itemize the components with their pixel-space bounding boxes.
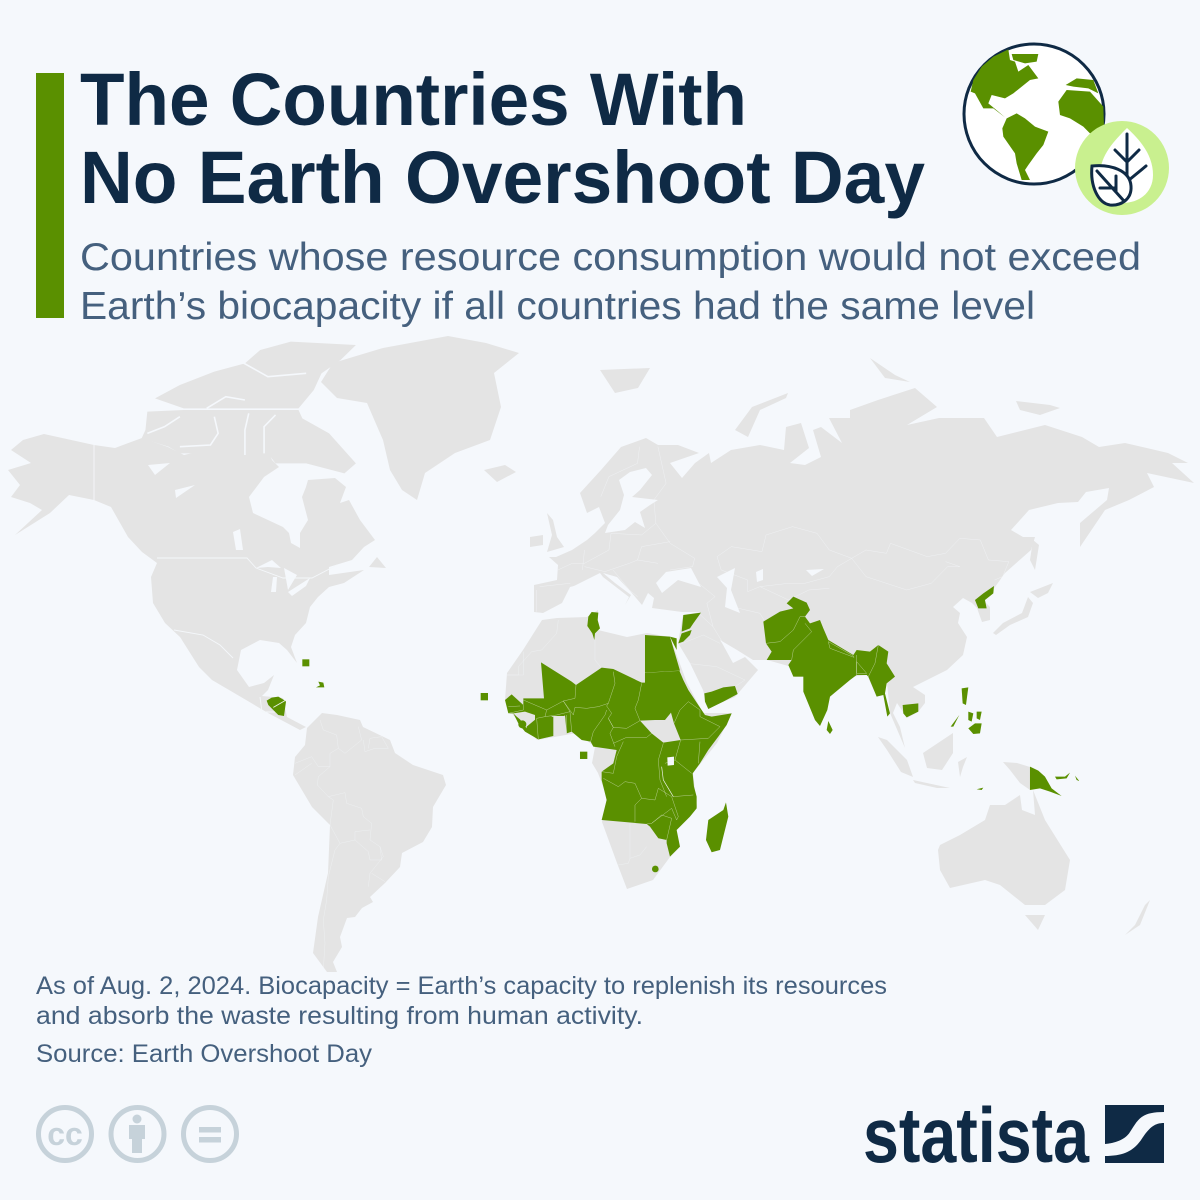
world map [8, 336, 1194, 972]
country borders: Eurasia [536, 447, 1009, 657]
North Africa and Levant countries [587, 612, 738, 872]
footnote: As of Aug. 2, 2024. Biocapacity = Earth’s capacity to replenish its resources [36, 972, 887, 1000]
Statista logo [863, 1091, 1164, 1179]
source: Source: Earth Overshoot Day [36, 1040, 373, 1068]
highlighted countries: South and Southeast Asia [763, 586, 1079, 796]
African internal borders [508, 671, 720, 840]
Guinea (not highlighted) [513, 712, 535, 728]
title [80, 58, 925, 219]
subtitle [80, 236, 1141, 328]
Sub-Saharan Africa highlighted block [505, 662, 732, 857]
globe [964, 44, 1104, 184]
icon: attribution [111, 1108, 164, 1160]
Haiti [316, 682, 324, 687]
Honduras–Nicaragua border [273, 701, 285, 707]
footnote [36, 972, 887, 1030]
inland seas and lakes [148, 463, 824, 667]
other Asian countries [827, 586, 1079, 796]
marker: Sao Tome and Principe [580, 752, 587, 759]
South Asian borders [766, 617, 878, 677]
icon: Creative Commons [38, 1108, 92, 1160]
Liberia and Ivory Coast fill [527, 717, 553, 739]
accent bar [36, 73, 64, 318]
icon: Creative Commons: cc [47, 1116, 83, 1152]
Ghana (not highlighted) [552, 716, 566, 737]
title: No Earth Overshoot Day [80, 136, 925, 219]
country borders: Africa grey areas [507, 620, 745, 865]
Sierra Leone [518, 720, 526, 728]
subtitle: Earth’s biocapacity if all countries had the same level [80, 285, 1035, 328]
marker: Cape Verde [481, 693, 488, 700]
icon: no derivatives [184, 1108, 236, 1160]
base map: grey land [8, 336, 1194, 972]
South Asia highlighted block [763, 597, 895, 726]
footnote: and absorb the waste resulting from human activity. [36, 1002, 643, 1030]
globe continents [971, 49, 1104, 180]
subtitle: Countries whose resource consumption would not exceed [80, 236, 1141, 279]
highlighted countries: Caribbean and Central America [267, 659, 324, 716]
leaf badge [1075, 121, 1169, 215]
title: The Countries With [80, 58, 747, 141]
South Sudan (not highlighted) [640, 713, 681, 743]
highlighted countries: Africa and Yemen [481, 612, 738, 872]
Honduras and Nicaragua [267, 697, 286, 716]
Bahamas marker [302, 659, 309, 666]
country borders: Americas north [94, 445, 337, 712]
icon: globe with leaf [964, 44, 1169, 215]
Canadian Arctic archipelago [142, 342, 356, 473]
Lake Victoria [667, 757, 674, 766]
country borders: South America [295, 720, 388, 970]
logo mark [1105, 1105, 1164, 1163]
wordmark: statista [863, 1091, 1090, 1179]
